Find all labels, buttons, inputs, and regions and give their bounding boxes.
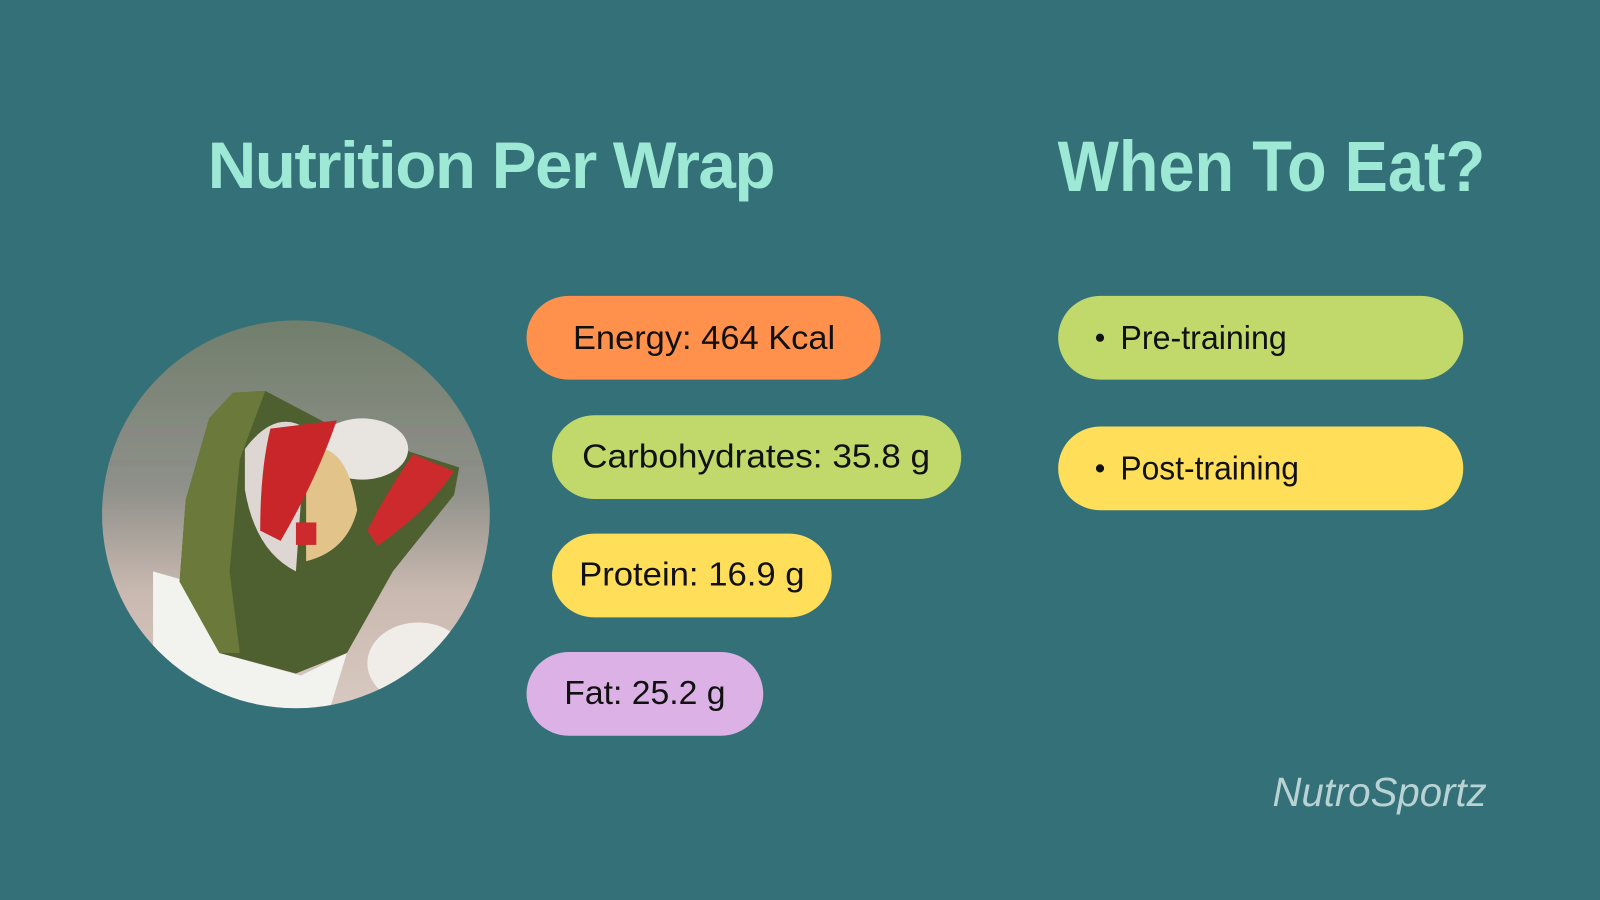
pill: Pre-training: Pre-training	[1120, 320, 1287, 357]
signature: NutroSportz: NutroSportz	[1272, 769, 1487, 815]
pill: Protein: Protein: 16.9 g	[579, 557, 805, 594]
pill: Carbohydrates	[552, 415, 961, 499]
pill: Carbohydrates: Carbohydrates: 35.8 g	[582, 438, 930, 475]
photo: wrap in circle	[102, 320, 490, 708]
title: Nutrition Per Wrap: Nutrition Per Wrap	[208, 129, 774, 203]
pill: Pre-training	[1058, 296, 1463, 380]
pill: Post-training	[1058, 427, 1463, 510]
pill: Energy	[527, 296, 881, 380]
pill: Protein	[552, 534, 832, 617]
pill: Energy: Energy: 464 Kcal	[573, 320, 835, 357]
pill: Post-training: Post-training	[1120, 451, 1299, 488]
title: When To Eat?: When To Eat?	[1058, 127, 1485, 207]
pill: Fat	[527, 652, 763, 736]
pill: Fat: Fat: 25.2 g	[564, 675, 726, 712]
